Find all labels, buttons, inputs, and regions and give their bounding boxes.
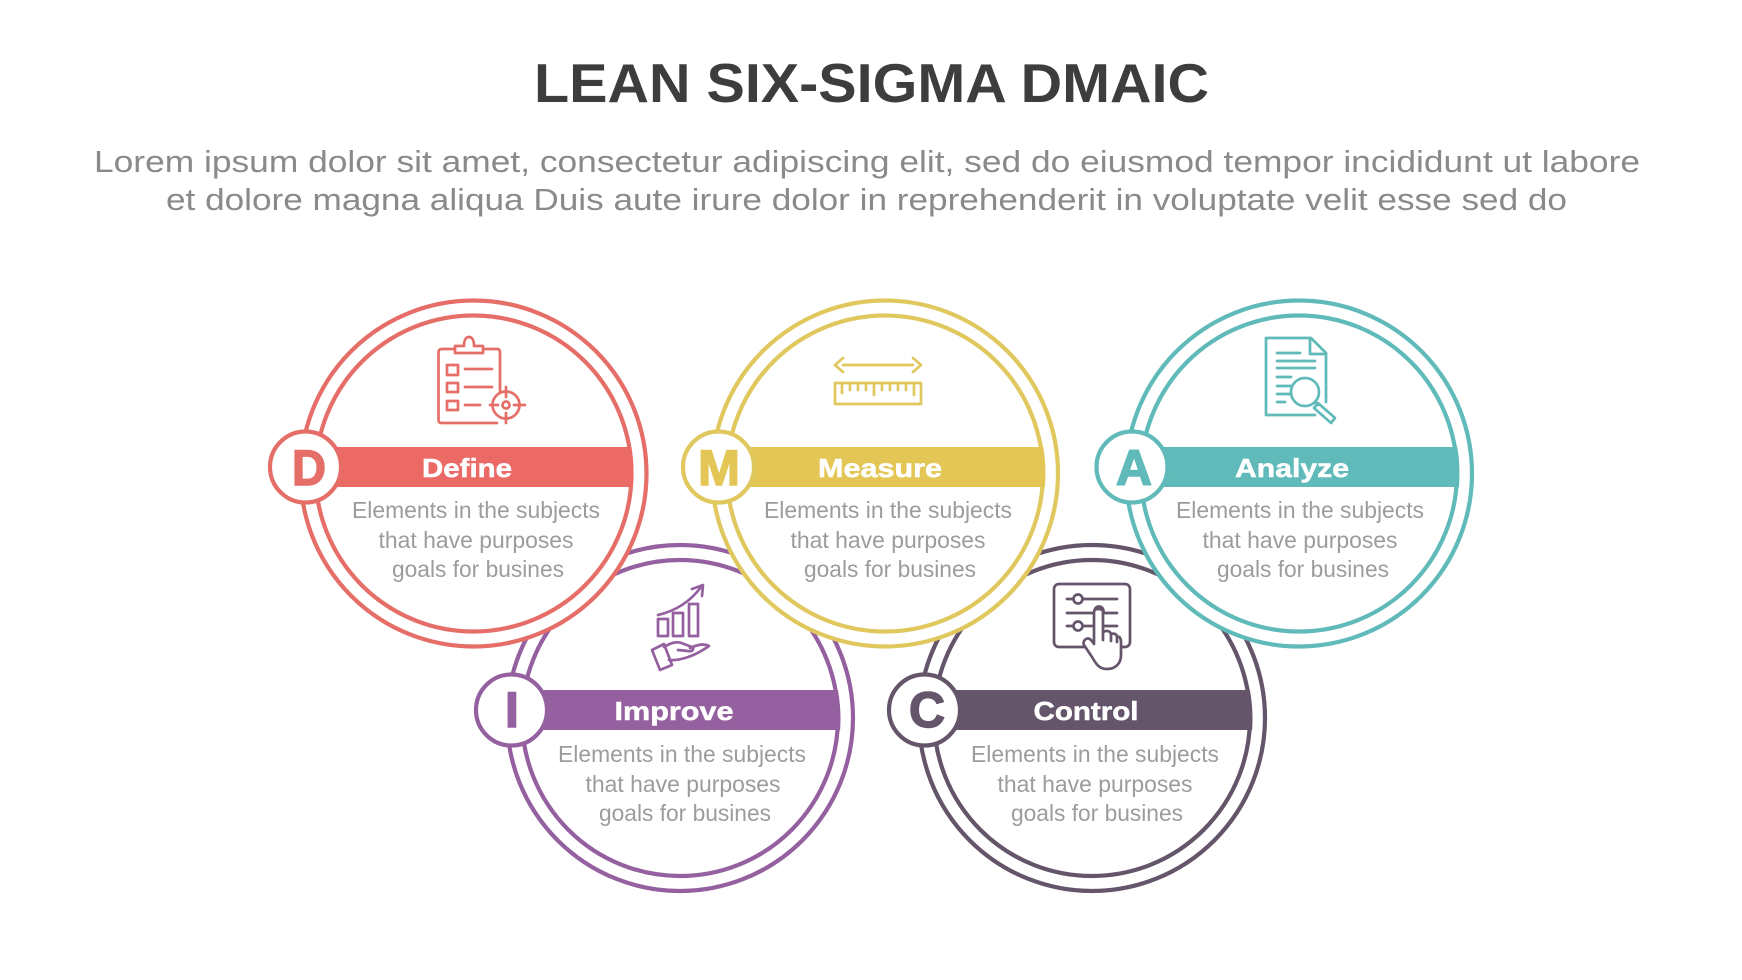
measure badge (683, 432, 754, 502)
icon: ruler with arrow (835, 358, 921, 404)
improve description (558, 741, 806, 826)
define description: Elements in the subjects (352, 497, 600, 523)
icon: document with magnifier (1266, 338, 1335, 423)
measure rings (712, 300, 1058, 646)
improve rings (507, 545, 853, 891)
define description: goals for busines (392, 556, 564, 582)
measure description: Elements in the subjects (764, 497, 1012, 523)
define heading: Define (422, 453, 512, 483)
improve heading: Improve (614, 696, 734, 726)
analyze rings (1126, 300, 1472, 646)
control description (971, 741, 1219, 826)
control badge: C (909, 682, 945, 738)
icon: growth chart on hand (652, 585, 709, 670)
improve description: Elements in the subjects (558, 741, 806, 767)
improve badge: I (505, 682, 519, 738)
subtitle text block: et dolore magna aliqua Duis aute irure dolor in reprehenderit in voluptate velit esse sed do (166, 182, 1567, 217)
control band (924, 690, 1252, 730)
subtitle text block (94, 144, 1640, 217)
analyze badge (1096, 432, 1168, 502)
define rings (300, 300, 646, 646)
panel: improve (476, 545, 853, 891)
icon: sliders with hand (1054, 584, 1130, 669)
measure heading: Measure (818, 453, 942, 483)
measure description (764, 497, 1012, 582)
analyze description (1176, 497, 1424, 582)
measure description: that have purposes (790, 527, 986, 553)
analyze description: goals for busines (1217, 556, 1389, 582)
control description: that have purposes (998, 771, 1192, 797)
define description: that have purposes (378, 527, 574, 553)
analyze badge: A (1116, 440, 1152, 496)
define description (352, 497, 600, 582)
control description: goals for busines (1011, 800, 1183, 826)
panel: analyze (1096, 300, 1472, 646)
define band (305, 447, 633, 487)
improve description: goals for busines (599, 800, 771, 826)
improve band (511, 690, 840, 730)
analyze description: Elements in the subjects (1176, 497, 1424, 523)
measure badge: M (698, 440, 740, 496)
subtitle text block: Lorem ipsum dolor sit amet, consectetur adipiscing elit, sed do eiusmod tempor incididunt ut labore (94, 144, 1640, 179)
measure description: goals for busines (804, 556, 976, 582)
analyze band (1131, 447, 1459, 487)
measure band (718, 447, 1045, 487)
panel: control (889, 545, 1265, 891)
control badge (889, 674, 960, 746)
analyze heading: Analyze (1235, 453, 1349, 483)
control rings (919, 545, 1265, 891)
panel: measure (683, 300, 1058, 646)
icon: clipboard with target (438, 337, 525, 423)
control heading: Control (1034, 696, 1138, 726)
improve badge (476, 674, 547, 746)
define badge: D (292, 440, 326, 496)
improve description: that have purposes (586, 771, 780, 797)
define badge (270, 432, 341, 502)
panel: define (270, 300, 646, 646)
control description: Elements in the subjects (971, 741, 1219, 767)
title: LEAN SIX-SIGMA DMAIC (534, 52, 1209, 114)
analyze description: that have purposes (1202, 527, 1398, 553)
